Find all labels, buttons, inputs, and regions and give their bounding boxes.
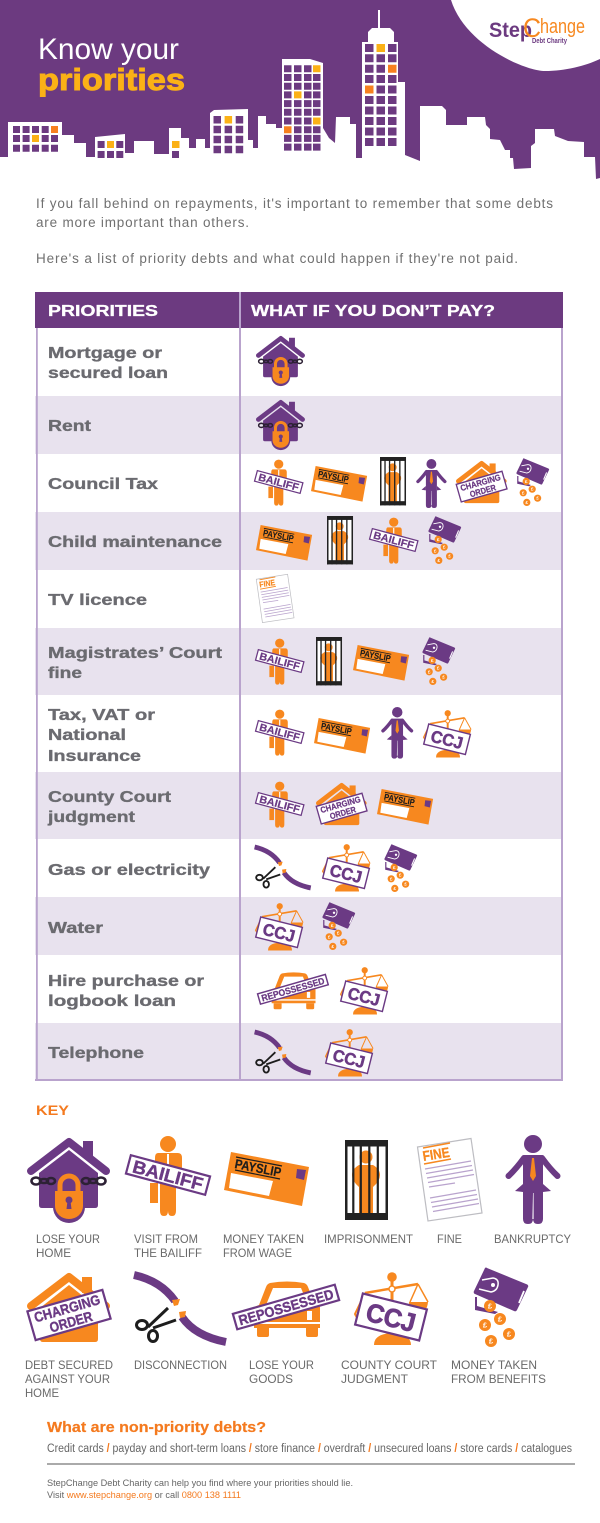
key: money from benefits: MONEY TAKEN (451, 1358, 537, 1372)
footer note (47, 1478, 353, 1500)
icon: ccj (326, 1029, 373, 1076)
key: bailiff (126, 1136, 210, 1260)
city skyline (0, 10, 600, 190)
intro text: If you fall behind on repayments, it's important to remember that some debts (36, 196, 553, 211)
key: bailiff: BAILIFF (131, 1157, 205, 1194)
icon: bailiff (255, 460, 303, 506)
key: bailiff: VISIT FROM (134, 1232, 198, 1246)
logo panel: C (523, 13, 541, 43)
icon: fine (256, 574, 294, 623)
non-priority debts: What are non-priority debts? (47, 1419, 266, 1436)
icon: payslip: PAYSLIP (317, 469, 350, 484)
row: tv licence (35, 570, 563, 628)
row: mortgage (35, 328, 563, 396)
table header: WHAT IF YOU DON’T PAY? (251, 303, 495, 320)
icon: bailiff (256, 710, 304, 756)
key: money from wage: MONEY TAKEN (223, 1232, 304, 1246)
key: charging order: CHARGING (32, 1291, 102, 1325)
icon: bailiff: BAILIFF (258, 795, 301, 816)
key: lose your goods: REPOSSESSED (237, 1286, 335, 1328)
footer note: Visit www.stepchange.org or call 0800 138 1111 (47, 1490, 241, 1500)
key: county court judgment (341, 1272, 438, 1386)
non-priority debts: Credit cards / payday and short-term loans / store finance / overdraft / unsecured loans / store cards / catalogues (47, 1443, 572, 1455)
icon: fine: FINE (259, 578, 276, 589)
key: county court judgment: CCJ (363, 1297, 419, 1338)
row: county court: County Court (48, 789, 172, 806)
icon: bailiff (256, 639, 304, 685)
table header: PRIORITIES (48, 303, 158, 320)
row: mortgage: Mortgage or (48, 345, 162, 362)
row: telephone (35, 1023, 563, 1081)
icon: bailiff: BAILIFF (258, 723, 301, 744)
icon: payslip: PAYSLIP (359, 648, 392, 663)
icon: payslip: PAYSLIP (383, 792, 416, 807)
key: lose your home (31, 1141, 106, 1260)
logo panel: Step (489, 19, 532, 42)
logo panel: Debt Charity (532, 38, 567, 45)
icon: charging order: ORDER (469, 482, 497, 499)
intro text (36, 196, 553, 266)
icon: payslip (353, 645, 409, 681)
key: imprisonment (324, 1140, 414, 1246)
intro text: are more important than others. (36, 215, 249, 230)
icon: ccj: CCJ (429, 727, 465, 753)
row: magistrates (35, 628, 563, 695)
key: money from benefits (451, 1268, 546, 1386)
icon: repossessed: REPOSSESSED (260, 976, 326, 1003)
row: hire purchase: Hire purchase or (48, 973, 204, 990)
key heading: KEY (36, 1102, 70, 1118)
row: tax (35, 695, 563, 772)
title: priorities (38, 62, 185, 97)
row: water: Water (48, 920, 103, 937)
key: imprisonment: IMPRISONMENT (324, 1232, 414, 1246)
key: bankruptcy: BANKRUPTCY (494, 1232, 571, 1246)
icon: payslip (311, 466, 367, 502)
row: gas or electricity (35, 839, 563, 897)
icon: ccj (341, 967, 388, 1014)
row: mortgage: secured loan (48, 365, 168, 382)
row: child maintenance (35, 512, 563, 570)
key: lose your goods (233, 1282, 339, 1386)
row: tax: National (48, 727, 126, 744)
icon: payslip: PAYSLIP (320, 721, 353, 736)
key: lose your goods: LOSE YOUR (249, 1358, 314, 1372)
icon: payslip (377, 789, 433, 825)
icon: charging order: CHARGING (459, 472, 502, 493)
icon: bailiff: BAILIFF (258, 652, 301, 673)
key: money from wage (223, 1152, 309, 1260)
row: hire purchase: logbook loan (48, 993, 176, 1010)
title: Know your (38, 33, 179, 66)
key: money from benefits: FROM BENEFITS (451, 1372, 546, 1386)
row: council tax (35, 454, 563, 512)
header banner (0, 0, 600, 190)
row: council tax: Council Tax (48, 476, 158, 493)
icon: ccj (256, 903, 303, 950)
icon: charging order: CHARGING (319, 794, 362, 815)
icon: payslip (256, 525, 312, 561)
priorities table (35, 292, 563, 1081)
icon: ccj: CCJ (346, 984, 382, 1010)
icon: charging order: ORDER (329, 804, 357, 821)
table header (35, 292, 563, 328)
icon: bailiff (256, 782, 304, 828)
icon: bailiff: BAILIFF (257, 473, 300, 494)
row: county court (35, 772, 563, 839)
row: telephone: Telephone (48, 1045, 144, 1062)
footer note: StepChange Debt Charity can help you find where your priorities should lie. (47, 1478, 353, 1488)
key: fine: FINE (421, 1144, 451, 1164)
row: water (35, 897, 563, 955)
key: bailiff: THE BAILIFF (134, 1246, 202, 1260)
key legend (25, 1135, 571, 1400)
row: rent (35, 396, 563, 454)
row: gas or electricity: Gas or electricity (48, 862, 210, 879)
key: charging order: ORDER (48, 1308, 94, 1335)
title (38, 33, 185, 97)
logo panel: hange (540, 16, 585, 38)
icon: payslip (314, 718, 370, 754)
icon: charging order (456, 463, 507, 503)
row: magistrates: fine (48, 665, 82, 682)
key: fine (418, 1138, 482, 1246)
key: fine: FINE (437, 1232, 462, 1246)
non-priority debts (47, 1419, 572, 1455)
icon: ccj: CCJ (331, 1046, 367, 1072)
icon: bailiff: BAILIFF (372, 531, 415, 552)
key: disconnection (134, 1275, 227, 1372)
key: lose your home: LOSE YOUR (36, 1232, 100, 1246)
icon: bailiff (370, 518, 418, 564)
row: tv licence: TV licence (48, 592, 147, 609)
icon: ccj (424, 710, 471, 757)
key: lose your home: HOME (36, 1246, 71, 1260)
row: county court: judgment (47, 809, 136, 826)
icon: charging order (316, 785, 367, 825)
icon: ccj (323, 844, 370, 891)
logo panel (451, 0, 600, 71)
key: disconnection: DISCONNECTION (134, 1358, 227, 1372)
row: tax: Tax, VAT or (48, 707, 155, 724)
row: rent: Rent (48, 418, 92, 435)
key: charging order: AGAINST YOUR (25, 1372, 110, 1386)
key: charging order: HOME (25, 1386, 59, 1400)
row: tax: Insurance (48, 748, 141, 765)
icon: payslip: PAYSLIP (262, 528, 295, 543)
row: hire purchase (35, 955, 563, 1023)
key: bankruptcy (494, 1135, 571, 1246)
key: county court judgment: COUNTY COURT (341, 1358, 438, 1372)
row: magistrates: Magistrates’ Court (48, 645, 223, 662)
key: charging order (25, 1277, 113, 1400)
key: money from wage: FROM WAGE (223, 1246, 292, 1260)
key: county court judgment: JUDGMENT (341, 1372, 409, 1386)
icon: ccj: CCJ (328, 861, 364, 887)
icon: ccj: CCJ (261, 920, 297, 946)
key: lose your goods: GOODS (249, 1372, 293, 1386)
row: child maintenance: Child maintenance (48, 534, 222, 551)
key: charging order: DEBT SECURED (25, 1358, 113, 1372)
intro text: Here's a list of priority debts and what could happen if they're not paid. (36, 251, 518, 266)
key: money from wage: PAYSLIP (234, 1156, 283, 1180)
